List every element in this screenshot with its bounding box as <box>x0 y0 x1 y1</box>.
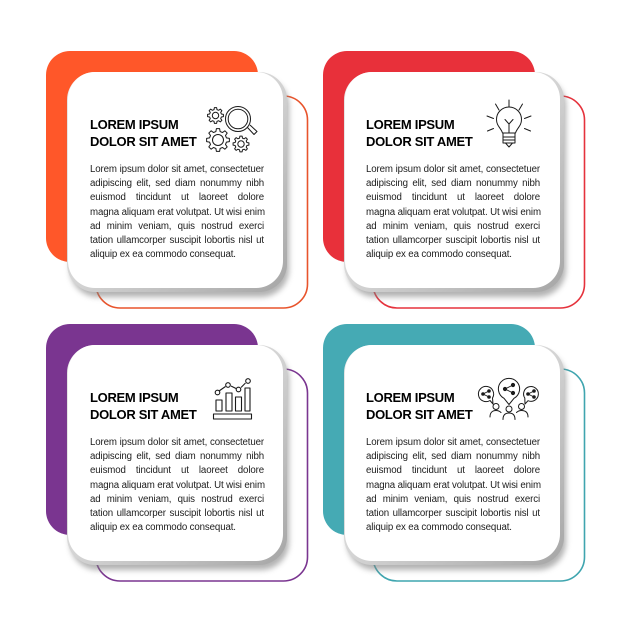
body: red card: ad minim veniam, quis nostrud exerci <box>366 221 540 232</box>
heading: orange card <box>90 117 197 149</box>
body: orange card: tation ullamcorper suscipit lobortis nisl ut <box>90 235 264 246</box>
icon: gears and magnifier <box>207 106 257 152</box>
body: red card: adipiscing elit, sed diam nonummy nibh <box>366 178 540 189</box>
text block: red card <box>366 117 541 260</box>
body: orange card: adipiscing elit, sed diam nonummy nibh <box>90 178 264 189</box>
heading: purple card: LOREM IPSUM <box>90 390 178 405</box>
panel: teal card <box>323 324 584 581</box>
text block: orange card <box>90 117 265 260</box>
heading: teal card: LOREM IPSUM <box>366 390 454 405</box>
body: red card <box>366 164 541 260</box>
body: teal card: Lorem ipsum dolor sit amet, consectetuer <box>366 437 540 448</box>
body: red card: Lorem ipsum dolor sit amet, consectetuer <box>366 164 540 175</box>
body: teal card <box>366 437 541 533</box>
heading: red card <box>366 117 473 149</box>
body: red card: tation ullamcorper suscipit lobortis nisl ut <box>366 235 540 246</box>
text block: teal card <box>366 390 541 533</box>
icon: bar chart <box>214 379 252 419</box>
heading: red card: LOREM IPSUM <box>366 117 454 132</box>
body: red card: euismod tincidunt ut laoreet dolore <box>366 192 540 203</box>
heading: teal card <box>366 390 473 422</box>
heading: teal card: DOLOR SIT AMET <box>366 407 473 422</box>
heading: orange card: DOLOR SIT AMET <box>90 134 197 149</box>
body: purple card: magna aliquam erat volutpat. Ut wisi enim <box>90 480 265 491</box>
text block: purple card <box>90 390 265 533</box>
body: teal card: tation ullamcorper suscipit lobortis nisl ut <box>366 508 540 519</box>
body: teal card: adipiscing elit, sed diam nonummy nibh <box>366 451 540 462</box>
icon: light bulb <box>487 100 531 147</box>
body: orange card <box>90 164 265 260</box>
body: orange card: euismod tincidunt ut laoreet dolore <box>90 192 264 203</box>
body: purple card <box>90 437 265 533</box>
body: orange card: ad minim veniam, quis nostrud exerci <box>90 221 264 232</box>
panel: purple card <box>46 324 308 581</box>
body: red card: magna aliquam erat volutpat. Ut wisi enim <box>366 207 541 218</box>
body: red card: aliquip ex ea commodo consequat. <box>366 249 512 260</box>
heading: orange card: LOREM IPSUM <box>90 117 178 132</box>
heading: red card: DOLOR SIT AMET <box>366 134 473 149</box>
body: purple card: euismod tincidunt ut laoreet dolore <box>90 465 264 476</box>
heading: purple card <box>90 390 197 422</box>
body: purple card: ad minim veniam, quis nostrud exerci <box>90 494 264 505</box>
panel: orange card <box>46 51 308 308</box>
icon: people sharing <box>478 378 538 420</box>
body: purple card: tation ullamcorper suscipit lobortis nisl ut <box>90 508 264 519</box>
body: purple card: adipiscing elit, sed diam nonummy nibh <box>90 451 264 462</box>
panel: red card <box>323 51 584 308</box>
body: teal card: aliquip ex ea commodo consequat. <box>366 522 512 533</box>
body: orange card: Lorem ipsum dolor sit amet, consectetuer <box>90 164 264 175</box>
body: orange card: magna aliquam erat volutpat. Ut wisi enim <box>90 207 265 218</box>
body: purple card: Lorem ipsum dolor sit amet, consectetuer <box>90 437 264 448</box>
body: purple card: aliquip ex ea commodo consequat. <box>90 522 236 533</box>
heading: purple card: DOLOR SIT AMET <box>90 407 197 422</box>
body: teal card: euismod tincidunt ut laoreet dolore <box>366 465 540 476</box>
body: orange card: aliquip ex ea commodo consequat. <box>90 249 236 260</box>
body: teal card: magna aliquam erat volutpat. Ut wisi enim <box>366 480 541 491</box>
body: teal card: ad minim veniam, quis nostrud exerci <box>366 494 540 505</box>
